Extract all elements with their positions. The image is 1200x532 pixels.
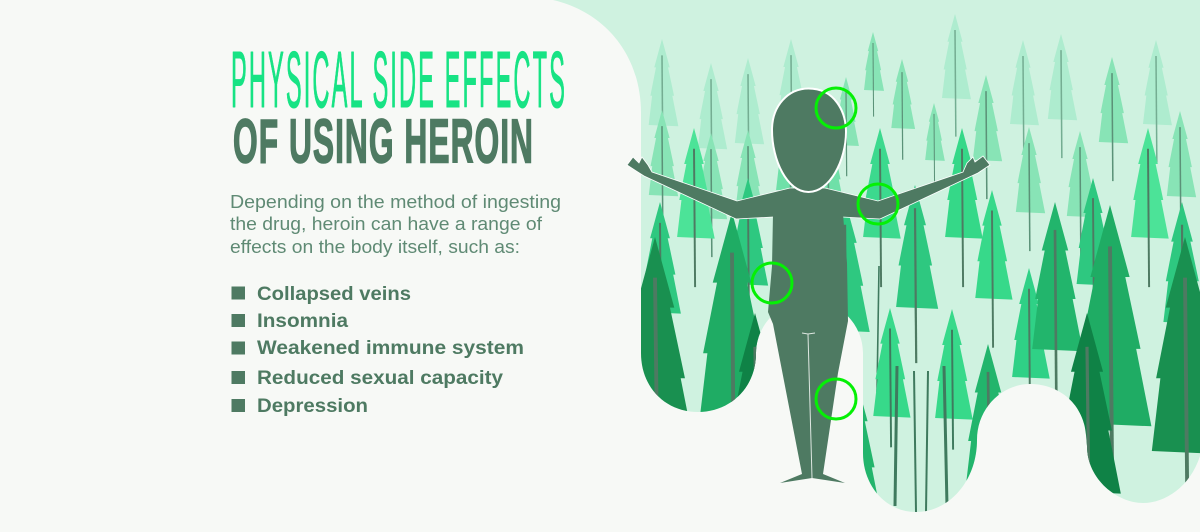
bullet: collapsed veins: Collapsed veins xyxy=(257,284,411,305)
trees: bright third row xyxy=(677,128,1169,384)
intro paragraph: Depending on the method of ingesting xyxy=(230,192,561,212)
trees: medium second row xyxy=(649,32,1196,257)
intro paragraph: the drug, heroin can have a range of xyxy=(230,214,543,234)
circle: elbow xyxy=(858,184,898,224)
forest scene xyxy=(540,0,1200,532)
bullet: weakened immune system: Weakened immune system xyxy=(257,338,524,359)
trees: bright front trees xyxy=(873,308,973,450)
figure: leg gap xyxy=(802,333,815,478)
forest backdrop xyxy=(540,0,1200,532)
front trunks xyxy=(895,366,947,506)
highlight circles xyxy=(752,88,898,419)
figure: arms xyxy=(627,156,990,219)
intro paragraph xyxy=(230,192,561,257)
figure: head xyxy=(772,88,846,192)
circle: knee xyxy=(816,379,856,419)
trees: mid green fourth row xyxy=(643,178,1200,517)
human figure xyxy=(627,88,990,483)
trees: dark front row xyxy=(622,205,1200,524)
circle: head xyxy=(816,88,856,128)
intro paragraph: effects on the body itself, such as: xyxy=(230,237,520,257)
circle: waist xyxy=(752,263,792,303)
bulleted list of effects xyxy=(232,284,524,417)
figure: torso and legs xyxy=(768,214,848,483)
bare trunks xyxy=(877,266,928,512)
title: of using heroin: OF USING HEROIN xyxy=(233,108,534,176)
bullet: reduced sexual capacity: Reduced sexual capacity xyxy=(257,368,503,389)
trees: palest back row xyxy=(648,14,1172,162)
bullet: depression: Depression xyxy=(257,396,368,417)
bullet: insomnia: Insomnia xyxy=(257,311,348,332)
